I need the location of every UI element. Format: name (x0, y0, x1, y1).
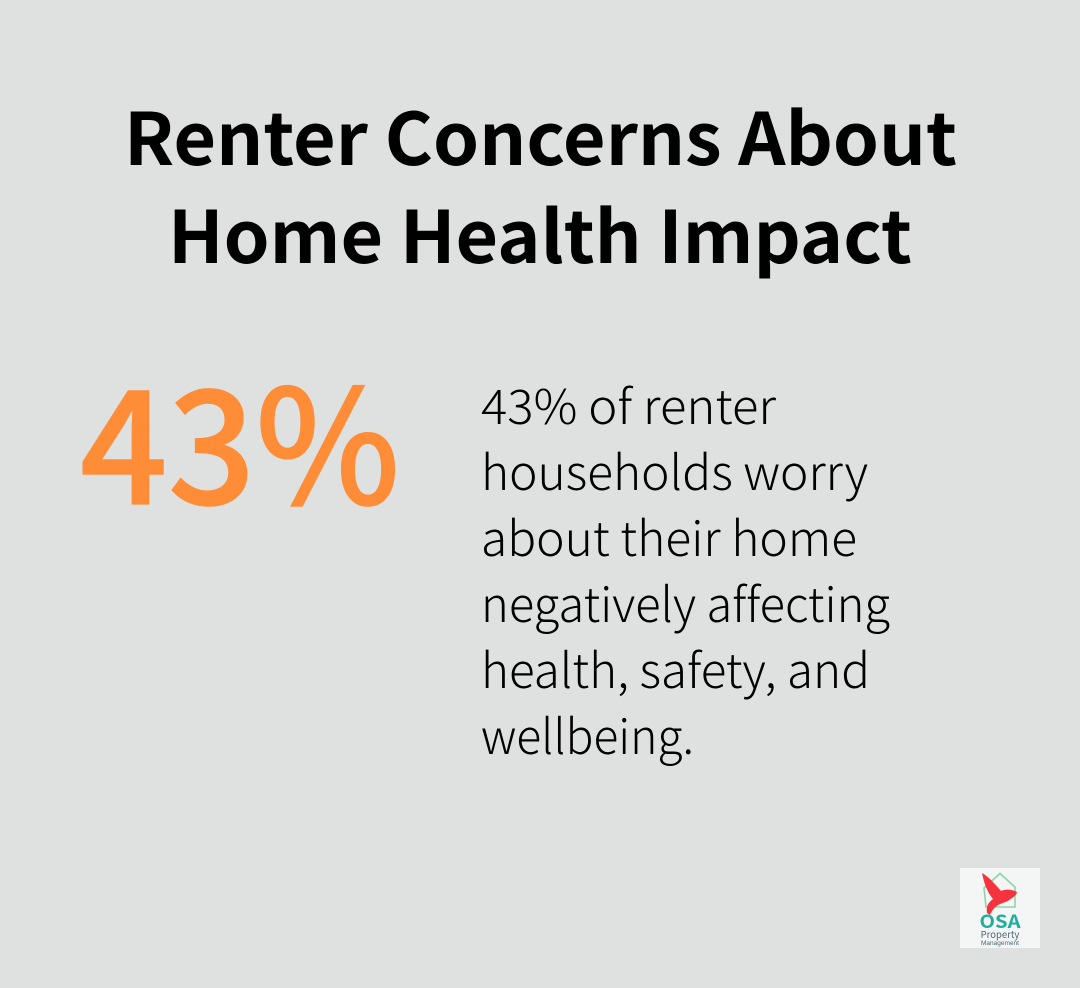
description text (481, 368, 890, 768)
logo: OSA Property Management (960, 868, 1040, 948)
logo wordmark: OSA (980, 908, 1021, 934)
title: Home Health Impact (168, 179, 912, 284)
description text: 43% of renter (481, 368, 777, 438)
icon: house outline (984, 874, 1015, 907)
description text: wellbeing. (481, 698, 694, 768)
icon: red bird (982, 873, 1017, 915)
logo: OSA Property Management: Property (981, 927, 1019, 941)
title: Renter Concerns About (124, 81, 957, 186)
description text: health, safety, and (481, 632, 870, 702)
description text: about their home (481, 500, 857, 570)
description text: negatively affecting (481, 566, 890, 636)
title (124, 81, 957, 284)
logo: OSA Property Management: Management (981, 940, 1019, 947)
big statistic: 43%: 43% (80, 321, 400, 550)
description text: households worry (481, 434, 868, 504)
